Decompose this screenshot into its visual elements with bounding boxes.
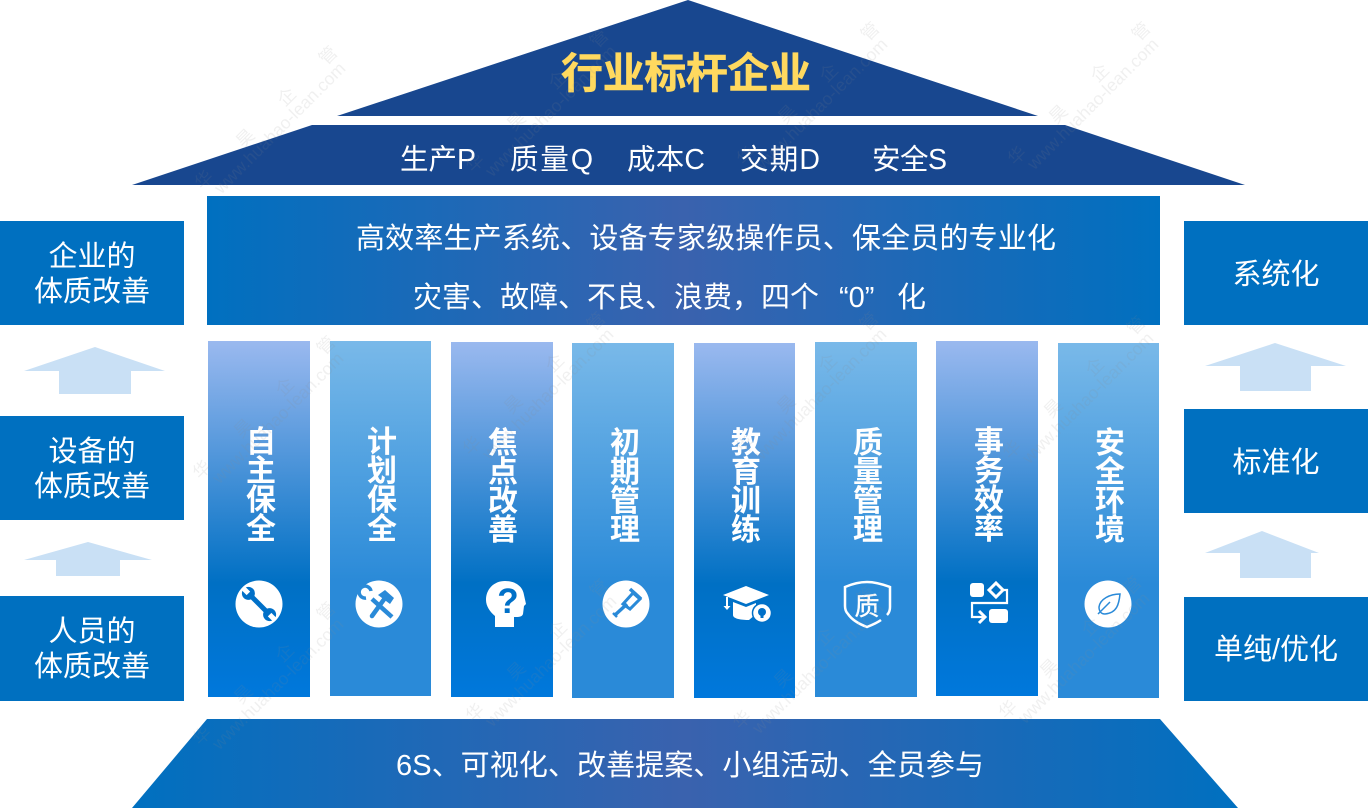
pillar: 质量管理: 理: [853, 514, 883, 547]
pillar: 事务效率: 率: [974, 513, 1004, 546]
pillar: 计划保全: 划: [367, 455, 397, 488]
arrow: up to enterprise: [24, 347, 165, 394]
beam panel: goals: [207, 196, 1160, 325]
pillar: 计划保全: 全: [367, 513, 397, 546]
box: equipment: [0, 416, 184, 520]
text: 华昊企管: [729, 553, 908, 733]
text: 华昊企管: [189, 569, 368, 749]
pillar: 安全环境: 环: [1095, 485, 1125, 518]
pillar: 安全环境: 安: [1095, 427, 1125, 460]
text: 华昊企管: [459, 279, 638, 459]
text: www.huahao-lean.com: [480, 41, 620, 181]
pillar: 自主保全: 全: [246, 513, 276, 546]
box: people: 人员的: [48, 615, 136, 648]
text: 华昊企管: [462, 0, 641, 176]
text: www.huahao-lean.com: [209, 58, 349, 198]
icon: quality shield: 质: [854, 593, 880, 621]
pillar: 教育训练: 教: [731, 427, 761, 460]
box: enterprise: 企业的: [48, 240, 136, 273]
text: www.huahao-lean.com: [1013, 588, 1153, 728]
pillar: 初期管理: [572, 343, 674, 698]
pillar: 自主保全: 自: [246, 426, 276, 459]
pillar: 质量管理: 质: [853, 427, 883, 460]
pillar: 初期管理: 管: [610, 485, 640, 518]
pillar: 初期管理: 理: [610, 514, 640, 547]
arrow: up to systemization: [1205, 343, 1346, 391]
beam panel: goals: 化: [897, 281, 926, 314]
pillar: 质量管理: 量: [853, 456, 883, 489]
roof band: PQCDS goals: [132, 125, 1245, 185]
foundation: company-wide activities: [132, 719, 1238, 808]
pillar: 质量管理: [815, 342, 917, 697]
pillar: 焦点改善: 点: [488, 456, 518, 489]
roof band: PQCDS goals: 安全S: [872, 144, 947, 176]
pillar: 安全环境: 全: [1095, 456, 1125, 489]
pillar: 安全环境: 境: [1095, 514, 1125, 547]
beam panel: goals: 灾害、故障、不良、浪费，四个: [413, 281, 819, 314]
box: equipment: 体质改善: [34, 470, 150, 503]
box: enterprise: [0, 221, 184, 325]
right column: management levels: [1184, 221, 1368, 701]
box: people: 体质改善: [34, 650, 150, 683]
text: www.huahao-lean.com: [480, 591, 620, 731]
icon: leaf: [1084, 580, 1132, 628]
icon: hammer and wrench: [356, 580, 402, 628]
pillar: 质量管理: 管: [853, 485, 883, 518]
beam panel: goals: “0”: [839, 282, 874, 314]
text: www.huahao-lean.com: [477, 324, 617, 464]
pillar: 自主保全: 主: [246, 455, 276, 488]
text: 华昊企管: [995, 543, 1174, 723]
text: 华昊企管: [189, 303, 368, 483]
pillar: 自主保全: 保: [246, 484, 276, 517]
text: www.huahao-lean.com: [747, 598, 887, 738]
icon: process flow: [970, 583, 1008, 623]
foundation: company-wide activities: 6S、可视化、改善提案、小组活动、全员参与: [396, 749, 984, 782]
text: 华昊企管: [191, 13, 370, 193]
icon: graduation cap: [723, 586, 772, 622]
pillar: 焦点改善: 焦: [488, 427, 518, 460]
roof band: PQCDS goals: 质量Q: [510, 144, 593, 176]
text: 华昊企管: [462, 546, 641, 726]
pillar: 初期管理: 初: [610, 427, 640, 460]
pillar: 焦点改善: [451, 342, 553, 697]
box: standardization: [1184, 409, 1368, 513]
roof title: 行业标杆企业: [561, 50, 811, 97]
roof band: PQCDS goals: 成本C: [627, 144, 705, 176]
icon: head with question mark: ?: [497, 582, 519, 621]
text: www.huahao-lean.com: [750, 324, 890, 464]
arrow: up to equipment: [24, 542, 152, 576]
text: www.huahao-lean.com: [207, 614, 347, 754]
roof band: PQCDS goals: 生产P: [400, 144, 476, 176]
pillar: 教育训练: 练: [731, 514, 761, 547]
roof band: PQCDS goals: 交期D: [740, 144, 820, 176]
box: equipment: 设备的: [48, 435, 136, 468]
pillar: 事务效率: 效: [974, 484, 1004, 517]
left column: quality improvement levels: [0, 221, 184, 701]
text: www.huahao-lean.com: [1017, 328, 1157, 468]
text: 华昊企管: [732, 279, 911, 459]
roof apex: [337, 0, 1038, 116]
text: 华昊企管: [999, 283, 1178, 463]
pillar: 焦点改善: 改: [488, 485, 518, 518]
icon: crutch: [602, 580, 650, 628]
pillar: 教育训练: 育: [731, 456, 761, 489]
pillar: 计划保全: 保: [367, 484, 397, 517]
box: systemization: [1184, 221, 1368, 325]
arrow: up to standardization: [1205, 531, 1319, 578]
pillar: 事务效率: [936, 341, 1038, 696]
pillar: 计划保全: [330, 341, 431, 696]
pillar: 事务效率: 务: [974, 455, 1004, 488]
box: people: [0, 596, 184, 701]
text: www.huahao-lean.com: [1022, 34, 1162, 174]
text: www.huahao-lean.com: [751, 34, 891, 174]
pillar: 安全环境: [1058, 343, 1159, 698]
box: enterprise: 体质改善: [34, 275, 150, 308]
beam panel: goals: 高效率生产系统、设备专家级操作员、保全员的专业化: [356, 222, 1056, 255]
pillar: 自主保全: [208, 341, 310, 697]
box: simplification: [1184, 597, 1368, 701]
icon: quality shield: [845, 582, 890, 627]
pillar: 计划保全: 计: [367, 426, 397, 459]
pillar: 初期管理: 期: [610, 456, 640, 489]
pillar: 焦点改善: 善: [488, 514, 518, 547]
pillar: 事务效率: 事: [974, 426, 1004, 459]
text: www.huahao-lean.com: [207, 348, 347, 488]
icon: head with question mark: [486, 581, 526, 627]
pillar: 教育训练: 训: [731, 485, 761, 518]
box: standardization: 标准化: [1232, 446, 1320, 479]
box: simplification: 单纯/优化: [1214, 633, 1338, 666]
box: systemization: 系统化: [1232, 258, 1320, 291]
icon: wrench: [236, 580, 282, 628]
pillar: 教育训练: [694, 343, 795, 698]
